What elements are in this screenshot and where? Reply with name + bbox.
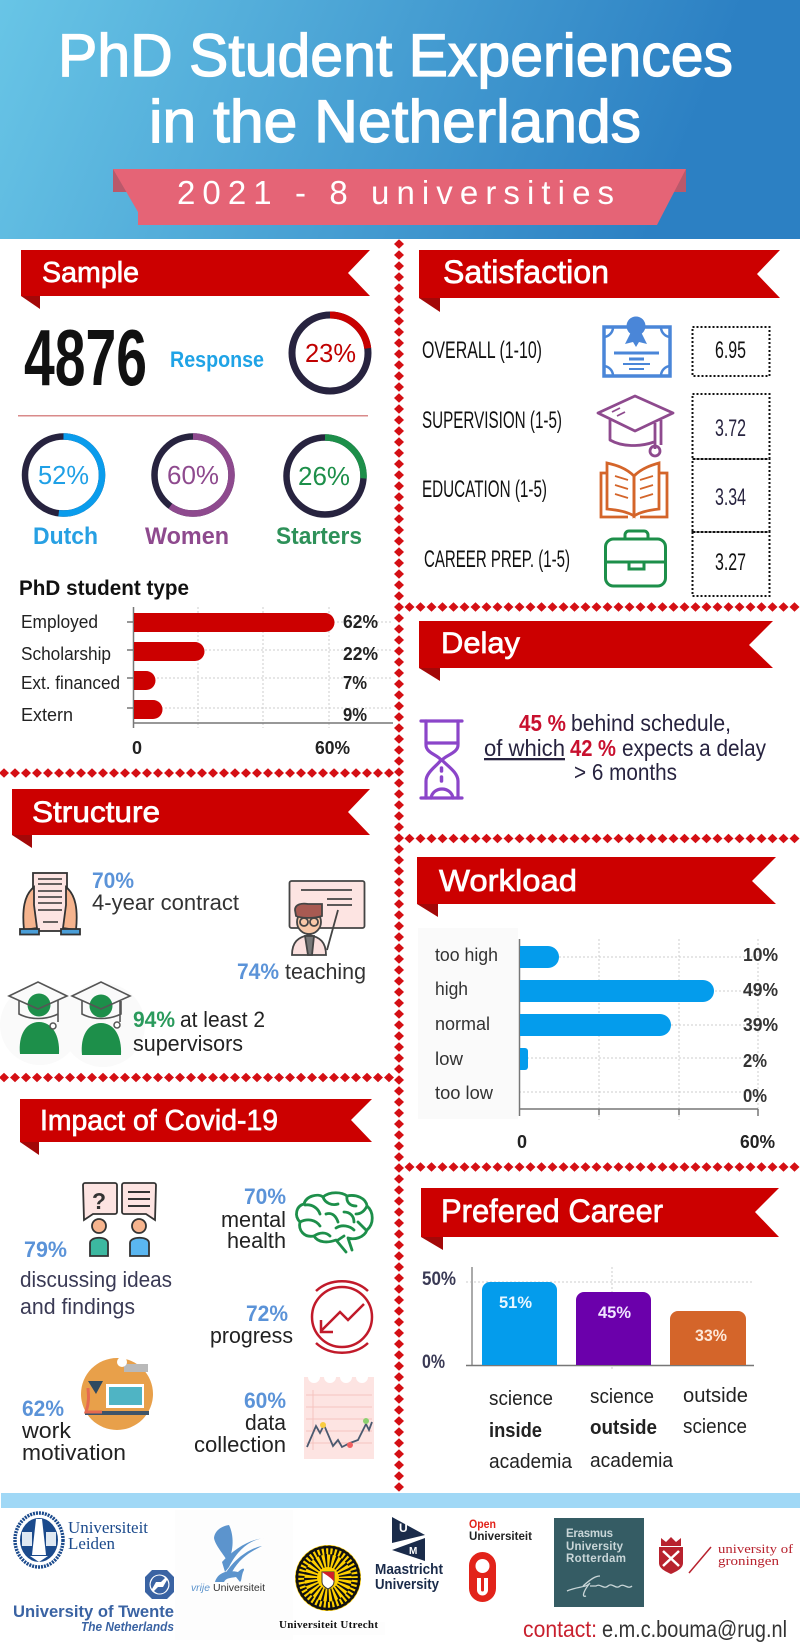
contact line: contact: (523, 1616, 597, 1642)
subtitle ribbon (113, 169, 686, 225)
bar chart: workload: too low (435, 1083, 494, 1103)
text: 62% work motivation: 62% (22, 1396, 64, 1421)
donut: Starters: Starters (276, 523, 362, 550)
bar chart: preferred career: 45% (598, 1303, 631, 1322)
icon: discussion between two people (83, 1183, 156, 1256)
banner: Structure: Structure (32, 796, 160, 829)
divider: right diamond line 2 (404, 833, 800, 844)
category label: science inside academia: academia (489, 1451, 573, 1473)
bar chart: workload: 2% (743, 1051, 767, 1071)
banner: Impact of Covid-19 (20, 1099, 372, 1155)
logo: Maastricht University: U (399, 1521, 408, 1535)
divider: right diamond line 3 (404, 1162, 800, 1172)
panel: impact of covid-19 (20, 1099, 374, 1465)
bar chart: workload: too high (435, 945, 498, 965)
logo: Vrije Universiteit: Universiteit (213, 1582, 265, 1594)
text: 60% data collection (194, 1388, 287, 1457)
text: 79% discussing ideas and findings: 79% (24, 1237, 67, 1262)
bar chart: preferred career: 50% (422, 1269, 456, 1290)
text: 94% at least 2 supervisors: supervisors (133, 1031, 243, 1056)
text: 60% data collection: collection (194, 1432, 286, 1457)
bar chart: preferred career: 33% (695, 1326, 727, 1345)
category label: science outside academia: academia (590, 1450, 674, 1472)
text: 79% discussing ideas and findings: discussing ideas (20, 1267, 172, 1292)
score values: 3.72 (715, 415, 746, 442)
delay statement: of which (484, 735, 565, 761)
label: Response: Response (170, 347, 264, 372)
text: 74% teaching: 74% (237, 959, 279, 984)
text: 60% data collection: data (245, 1410, 287, 1435)
donut: Starters (276, 438, 364, 550)
banner: Impact of Covid-19: Impact of Covid-19 (40, 1105, 278, 1137)
heading: PhD student type: PhD student type (19, 577, 189, 600)
row labels: EDUCATION (1-5) (422, 476, 547, 503)
banner: Prefered Career (421, 1188, 779, 1250)
banner: Delay (419, 621, 773, 681)
row labels: OVERALL (1-10) (422, 337, 542, 364)
text: 79% discussing ideas and findings (20, 1237, 172, 1319)
icon: data chart on paper (304, 1377, 374, 1459)
logo: University of Twente: University of Twente (13, 1602, 174, 1621)
banner: Prefered Career: Prefered Career (441, 1193, 663, 1229)
icon: teacher at board (290, 881, 364, 955)
logo: Utrecht University: Universiteit Utrecht (279, 1619, 378, 1631)
bar chart: PhD student type: 7% (343, 673, 367, 693)
logo: Leiden University (15, 1513, 148, 1567)
bar chart: workload: 60% (740, 1132, 775, 1152)
logo: University of Groningen: university of (718, 1541, 794, 1556)
banner: Satisfaction (419, 250, 780, 312)
text: 79% discussing ideas and findings: and findings (20, 1294, 135, 1319)
divider: left diamond line 1 (0, 768, 394, 778)
icon: contract in hands (20, 873, 80, 934)
donut: Starters: 26% (298, 461, 350, 491)
banner: Structure (12, 789, 370, 848)
text: 62% work motivation: motivation (22, 1440, 126, 1465)
icon: laptop on desk (81, 1357, 153, 1430)
text: 74% teaching (237, 959, 366, 984)
category label: outside science: science (683, 1416, 747, 1438)
logo: Maastricht University: Maastricht (375, 1561, 443, 1578)
text: 62% work motivation (21, 1396, 126, 1465)
delay statement (484, 710, 766, 785)
delay statement: > 6 months (574, 759, 677, 785)
footer band (1, 1493, 800, 1508)
big number: 4876: 4876 (24, 313, 147, 402)
contact line (523, 1616, 787, 1642)
divider: right diamond line 1 (404, 602, 800, 612)
bar chart: workload (418, 928, 778, 1152)
bar chart: PhD student type: 60% (315, 738, 350, 758)
icon: briefcase (606, 531, 666, 586)
logo: Utrecht University (255, 1545, 385, 1635)
logo: Open Universiteit: Universiteit (469, 1531, 532, 1543)
logo: Erasmus University Rotterdam: Rotterdam (566, 1553, 626, 1565)
text: 70% mental health: health (227, 1228, 286, 1253)
icon: certificate (604, 316, 670, 376)
logo: Erasmus University Rotterdam (554, 1518, 644, 1607)
bar chart: workload: low (435, 1049, 464, 1069)
subtitle ribbon: 2021 - 8 universities (177, 174, 614, 211)
score boxes (692, 327, 770, 596)
text: 70% mental health: mental (221, 1207, 286, 1232)
bar chart: workload: 10% (743, 945, 778, 965)
bar chart: PhD student type: 9% (343, 705, 367, 725)
banner: Sample (21, 250, 370, 309)
divider: vertical diamond line (394, 238, 404, 1492)
text: 4-year contract: 4-year contract (92, 890, 239, 915)
icon: brain (297, 1193, 372, 1252)
bar chart: preferred career: 51% (499, 1293, 532, 1312)
donut: Women: 60% (167, 460, 219, 490)
bar chart: PhD student type: Ext. financed (21, 673, 120, 693)
category label: science inside academia: inside (489, 1420, 542, 1442)
bar chart: PhD student type (21, 607, 393, 758)
category label: science inside academia (489, 1388, 573, 1473)
bar chart: PhD student type: Extern (21, 705, 73, 725)
bar chart: preferred career: 0% (422, 1352, 445, 1373)
panel: preferred career (421, 1188, 779, 1473)
logo: Open Universiteit (469, 1519, 532, 1602)
donut: Women: Women (145, 523, 229, 550)
text: 74% teaching: teaching (285, 959, 366, 984)
bar chart: workload: 39% (743, 1015, 778, 1035)
donut: 23% response: 23% (305, 338, 356, 368)
row labels: SUPERVISION (1-5) (422, 407, 562, 434)
donut: 23% response (292, 315, 368, 391)
logo: Leiden University: Leiden (68, 1534, 115, 1553)
panel: workload (417, 857, 778, 1152)
logo: Erasmus University Rotterdam: Erasmus (566, 1528, 613, 1540)
category label: outside science (683, 1385, 748, 1438)
delay statement: 45 % (519, 710, 566, 736)
title: PhD Student Experiences (58, 22, 733, 89)
logo: Maastricht University: University (375, 1576, 440, 1593)
text: 94% at least 2 supervisors (133, 1007, 265, 1056)
donut: Dutch (25, 436, 102, 550)
donut: Women (145, 436, 232, 550)
icon: open book (601, 463, 667, 517)
banner: Sample: Sample (42, 257, 139, 289)
bar chart: preferred career (422, 1267, 754, 1373)
panel: structure (0, 789, 370, 1067)
score values: 6.95 (715, 337, 746, 364)
header background (0, 0, 800, 239)
category label: outside science: outside (683, 1385, 748, 1407)
panel: university logos (13, 1510, 794, 1640)
score values: 3.27 (715, 549, 746, 576)
bar chart: PhD student type: Scholarship (21, 644, 111, 664)
logo: Vrije Universiteit: vrije (191, 1582, 210, 1594)
text: 72% progress: progress (210, 1323, 293, 1348)
icon: two supervisors with caps (0, 982, 145, 1067)
logo: Leiden University: Universiteit (68, 1518, 148, 1537)
bar chart: workload: 0% (743, 1086, 767, 1106)
bar chart: workload: high (435, 979, 468, 999)
delay statement: behind schedule, (571, 710, 731, 736)
bar chart: workload: normal (435, 1014, 490, 1034)
icon: graduation cap (598, 396, 673, 456)
text: 60% data collection: 60% (244, 1388, 286, 1413)
category label: science outside academia: science (590, 1386, 654, 1408)
logo: Maastricht University: M (409, 1546, 417, 1557)
icon: discussion between two people: ? (92, 1188, 106, 1214)
bar chart: workload: 49% (743, 980, 778, 1000)
text: 62% work motivation: work (21, 1418, 72, 1443)
panel: satisfaction (419, 250, 780, 596)
text: 72% progress: 72% (246, 1301, 288, 1326)
logo: University of Groningen: groningen (718, 1553, 780, 1568)
logo: Maastricht University (375, 1517, 443, 1593)
text: 4-year contract: 70% (92, 868, 134, 893)
score values (715, 337, 746, 576)
logo: Open Universiteit: Open (469, 1519, 496, 1531)
text: 4-year contract (92, 868, 239, 915)
donut: Dutch: 52% (38, 460, 89, 490)
panel: sample (18, 250, 393, 758)
banner: Workload (417, 857, 776, 917)
panel: delay (419, 621, 773, 798)
bar chart: workload: 0 (517, 1132, 527, 1152)
icon: hourglass (421, 721, 462, 798)
text: 70% mental health (221, 1184, 286, 1253)
delay statement: expects a delay (622, 735, 766, 761)
category label: science outside academia (590, 1386, 674, 1472)
delay statement: 42 % (570, 735, 616, 761)
divider: left diamond line 2 (0, 1072, 394, 1083)
banner: Satisfaction: Satisfaction (443, 254, 609, 290)
text: 72% progress (210, 1301, 293, 1348)
title: in the Netherlands (149, 88, 641, 155)
text: 94% at least 2 supervisors: 94% (133, 1007, 175, 1032)
category label: science outside academia: outside (590, 1417, 657, 1439)
row labels: CAREER PREP. (1-5) (424, 546, 570, 573)
logo: University of Twente (13, 1570, 174, 1634)
banner: Workload: Workload (439, 863, 577, 898)
icon: progress circle with arrow (312, 1281, 372, 1353)
bar chart: PhD student type: 62% (343, 612, 378, 632)
bar chart: PhD student type: Employed (21, 612, 98, 632)
row labels (422, 337, 570, 573)
title (58, 22, 733, 155)
banner: Delay: Delay (441, 627, 520, 660)
bar chart: PhD student type: 0 (132, 738, 142, 758)
donut: Dutch: Dutch (33, 523, 98, 550)
category label: science inside academia: science (489, 1388, 553, 1410)
text: 94% at least 2 supervisors: at least 2 (180, 1007, 265, 1032)
score values: 3.34 (715, 484, 746, 511)
bar chart: PhD student type: 22% (343, 644, 378, 664)
logo: University of Groningen (659, 1537, 794, 1574)
logo: University of Twente: The Netherlands (81, 1619, 174, 1634)
logo: Vrije Universiteit (175, 1510, 293, 1640)
logo: Erasmus University Rotterdam: University (566, 1541, 624, 1553)
text: 70% mental health: 70% (244, 1184, 286, 1209)
